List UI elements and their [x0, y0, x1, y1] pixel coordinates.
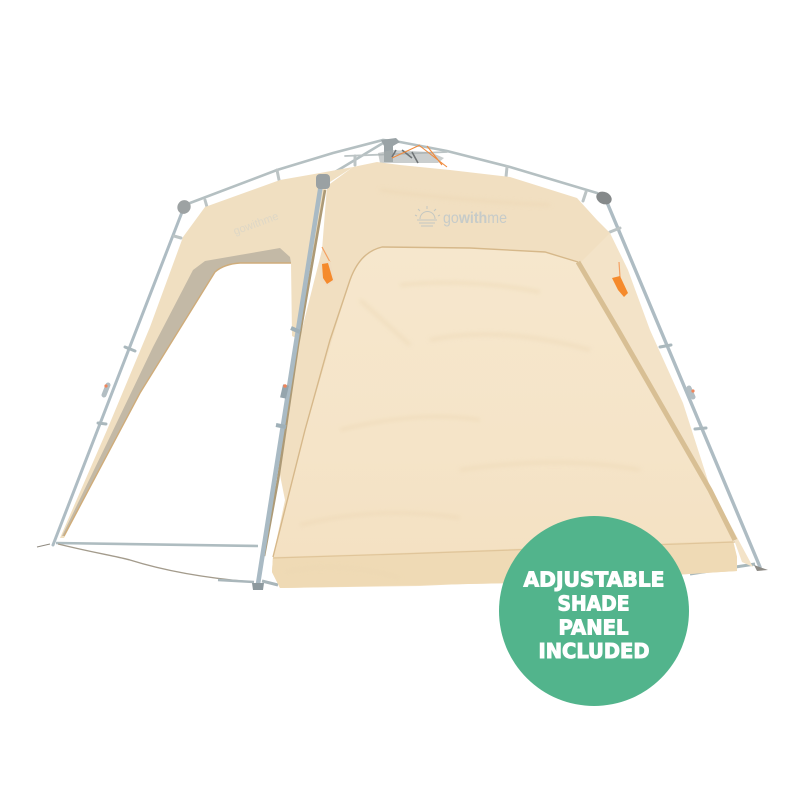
badge text: INCLUDED — [538, 639, 650, 663]
brand logo: gowithme — [415, 206, 507, 227]
callout badge — [499, 516, 689, 706]
icon: sun and waves — [415, 206, 440, 226]
tent fabric: main front panel — [272, 162, 753, 588]
inner shade panel — [272, 247, 737, 588]
fabric wrinkles — [285, 190, 640, 578]
brand logo: gowithme: gowithme — [443, 210, 507, 227]
badge text — [524, 568, 664, 663]
tent hub at roof peak — [378, 138, 447, 167]
tent frame: rear poles and roof arms — [53, 140, 760, 567]
orange clip left — [319, 247, 335, 286]
bottom hem band — [272, 541, 737, 588]
ground straps — [37, 543, 755, 585]
badge text: SHADE — [558, 592, 630, 616]
right panel seam band — [578, 262, 735, 540]
corner joint right — [594, 189, 614, 207]
front and rear pole joints — [104, 174, 768, 590]
badge text: ADJUSTABLE — [524, 568, 664, 592]
front pole shadow — [264, 190, 325, 556]
awning underside shade — [62, 248, 291, 536]
faded awning logo: gowithme — [232, 210, 280, 238]
orange clip right — [612, 262, 628, 297]
badge text: PANEL — [558, 616, 629, 640]
awning opening trim — [64, 263, 291, 536]
right corner light flap — [580, 233, 753, 567]
panel top seam — [273, 247, 578, 557]
corner joint centre — [316, 174, 330, 189]
corner joint left — [175, 198, 193, 216]
tent fabric: left side awning — [60, 167, 353, 538]
